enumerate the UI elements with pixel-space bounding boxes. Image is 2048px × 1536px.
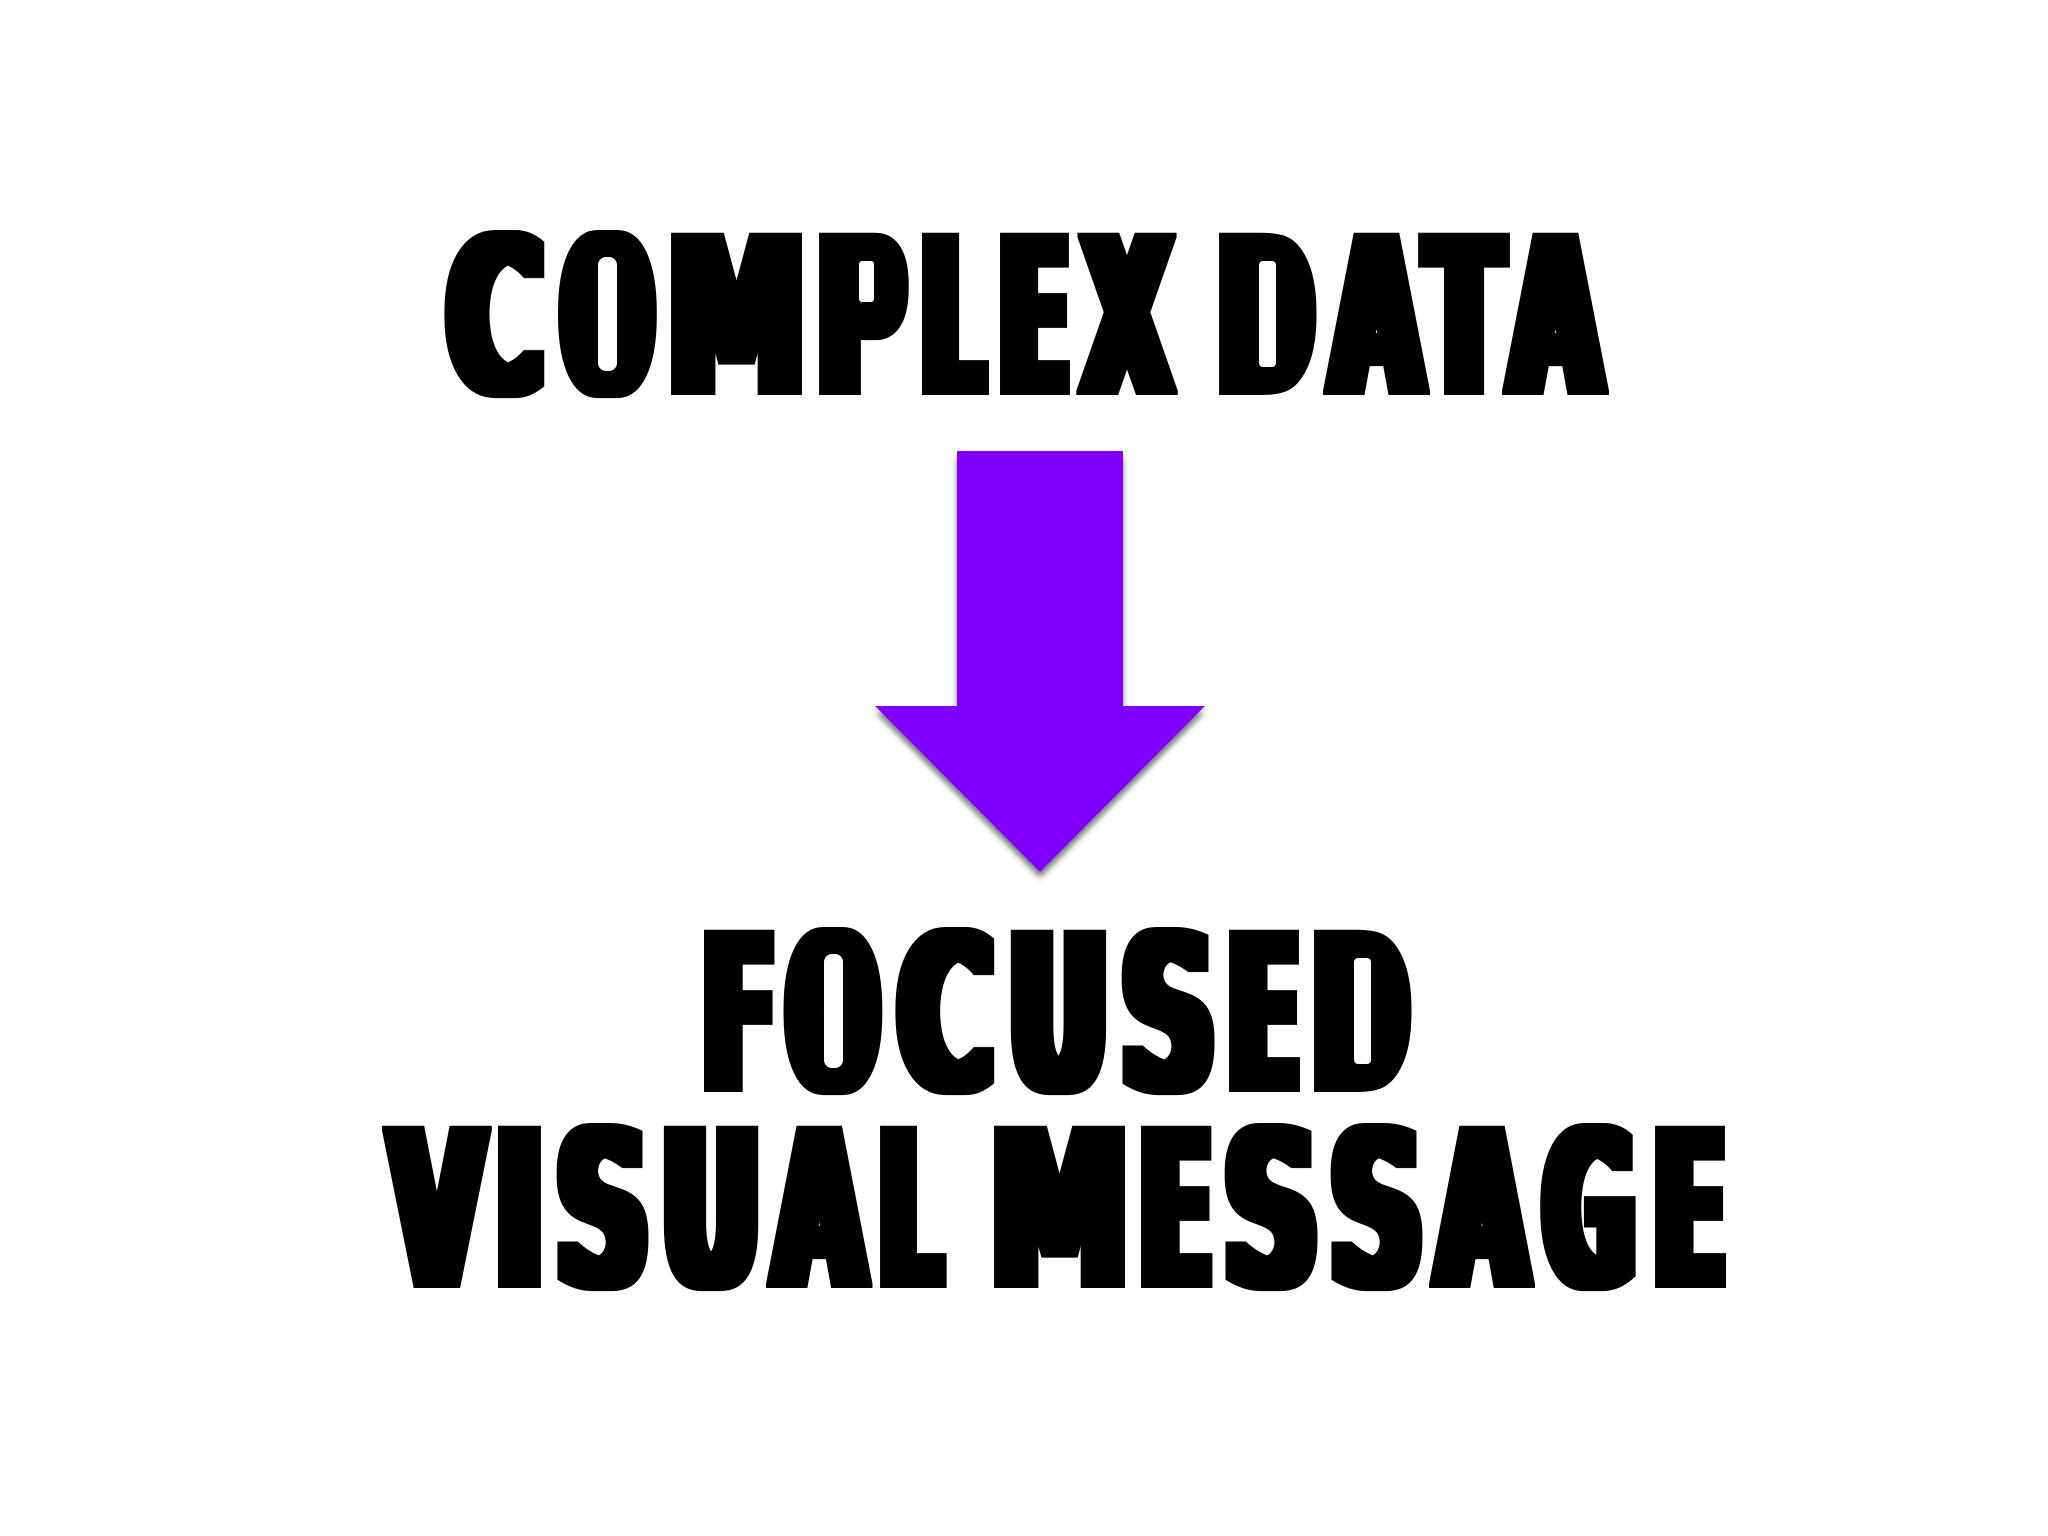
heading: focused visual message: G xyxy=(1545,1086,1634,1338)
heading: complex data: E xyxy=(1001,193,1067,445)
heading: focused visual message: L xyxy=(882,1086,939,1338)
heading: focused visual message: S xyxy=(558,1086,648,1338)
heading: complex data: A xyxy=(1332,193,1421,445)
heading: focused visual message: I xyxy=(497,1086,542,1338)
heading: focused visual message: A xyxy=(1438,1086,1526,1338)
heading: complex data: X xyxy=(1084,193,1170,445)
heading: focused visual message: O xyxy=(788,890,878,1142)
heading: focused visual message: S xyxy=(1123,890,1214,1142)
heading: focused visual message: D xyxy=(1314,890,1407,1142)
heading: complex data xyxy=(448,193,1600,445)
heading: complex data: T xyxy=(1428,193,1500,445)
heading: focused visual message: U xyxy=(1010,890,1107,1142)
heading: complex data: D xyxy=(1219,193,1312,445)
heading: focused visual message: S xyxy=(1226,1086,1317,1338)
heading: focused visual message: F xyxy=(705,890,773,1142)
heading: focused visual message xyxy=(391,890,1723,1338)
heading: focused visual message: E xyxy=(1142,1086,1210,1338)
heading: focused visual message: C xyxy=(899,890,992,1142)
heading: focused visual message: A xyxy=(775,1086,863,1338)
heading: focused visual message: S xyxy=(1332,1086,1422,1338)
heading: focused visual message: V xyxy=(391,1086,482,1338)
heading: complex data: O xyxy=(563,193,652,445)
infographic canvas: E xyxy=(1656,1086,1723,1338)
heading: complex data: P xyxy=(818,193,904,445)
heading: focused visual message: U xyxy=(663,1086,759,1338)
heading: complex data: M xyxy=(668,193,805,445)
arrow: purple down arrow xyxy=(875,451,1205,872)
heading: complex data: C xyxy=(448,193,542,445)
heading: focused visual message: M xyxy=(992,1086,1128,1338)
heading: focused visual message: E xyxy=(1230,890,1297,1142)
heading: complex data: A xyxy=(1511,193,1600,445)
heading: complex data: L xyxy=(924,193,982,445)
